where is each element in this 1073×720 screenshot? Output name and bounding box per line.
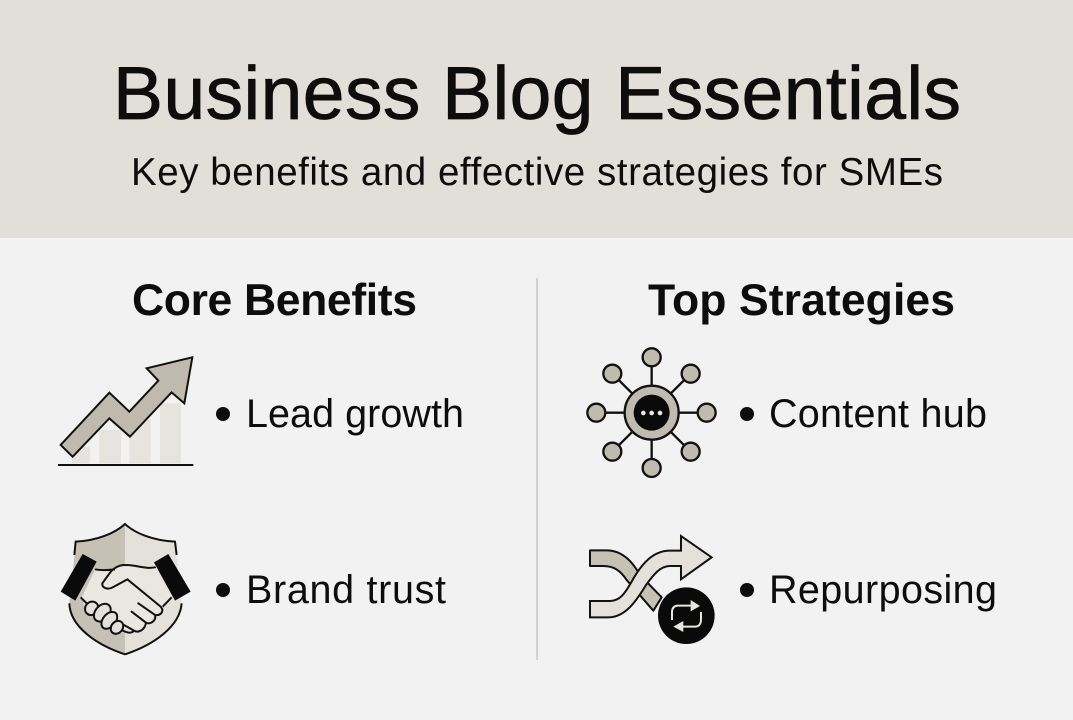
list item: brand trust: Brand trust [246, 568, 446, 612]
subtitle: Key benefits and effective strategies for SMEs [131, 151, 943, 194]
title: Business Blog Essentials [113, 51, 961, 135]
icon: content hub [587, 348, 716, 477]
panel: top strategies [587, 276, 997, 644]
icon: repurposing arrows [590, 536, 715, 644]
list item: lead growth: Lead growth [246, 392, 464, 436]
icon: growth chart [58, 357, 193, 465]
list item: content hub: Content hub [769, 392, 987, 436]
header banner [0, 0, 1073, 238]
list item: repurposing: Repurposing [769, 568, 997, 612]
heading: core benefits: Core Benefits [132, 276, 417, 325]
icon: handshake shield [61, 524, 191, 654]
heading: top strategies: Top Strategies [648, 276, 955, 325]
panel: core benefits [58, 276, 464, 654]
